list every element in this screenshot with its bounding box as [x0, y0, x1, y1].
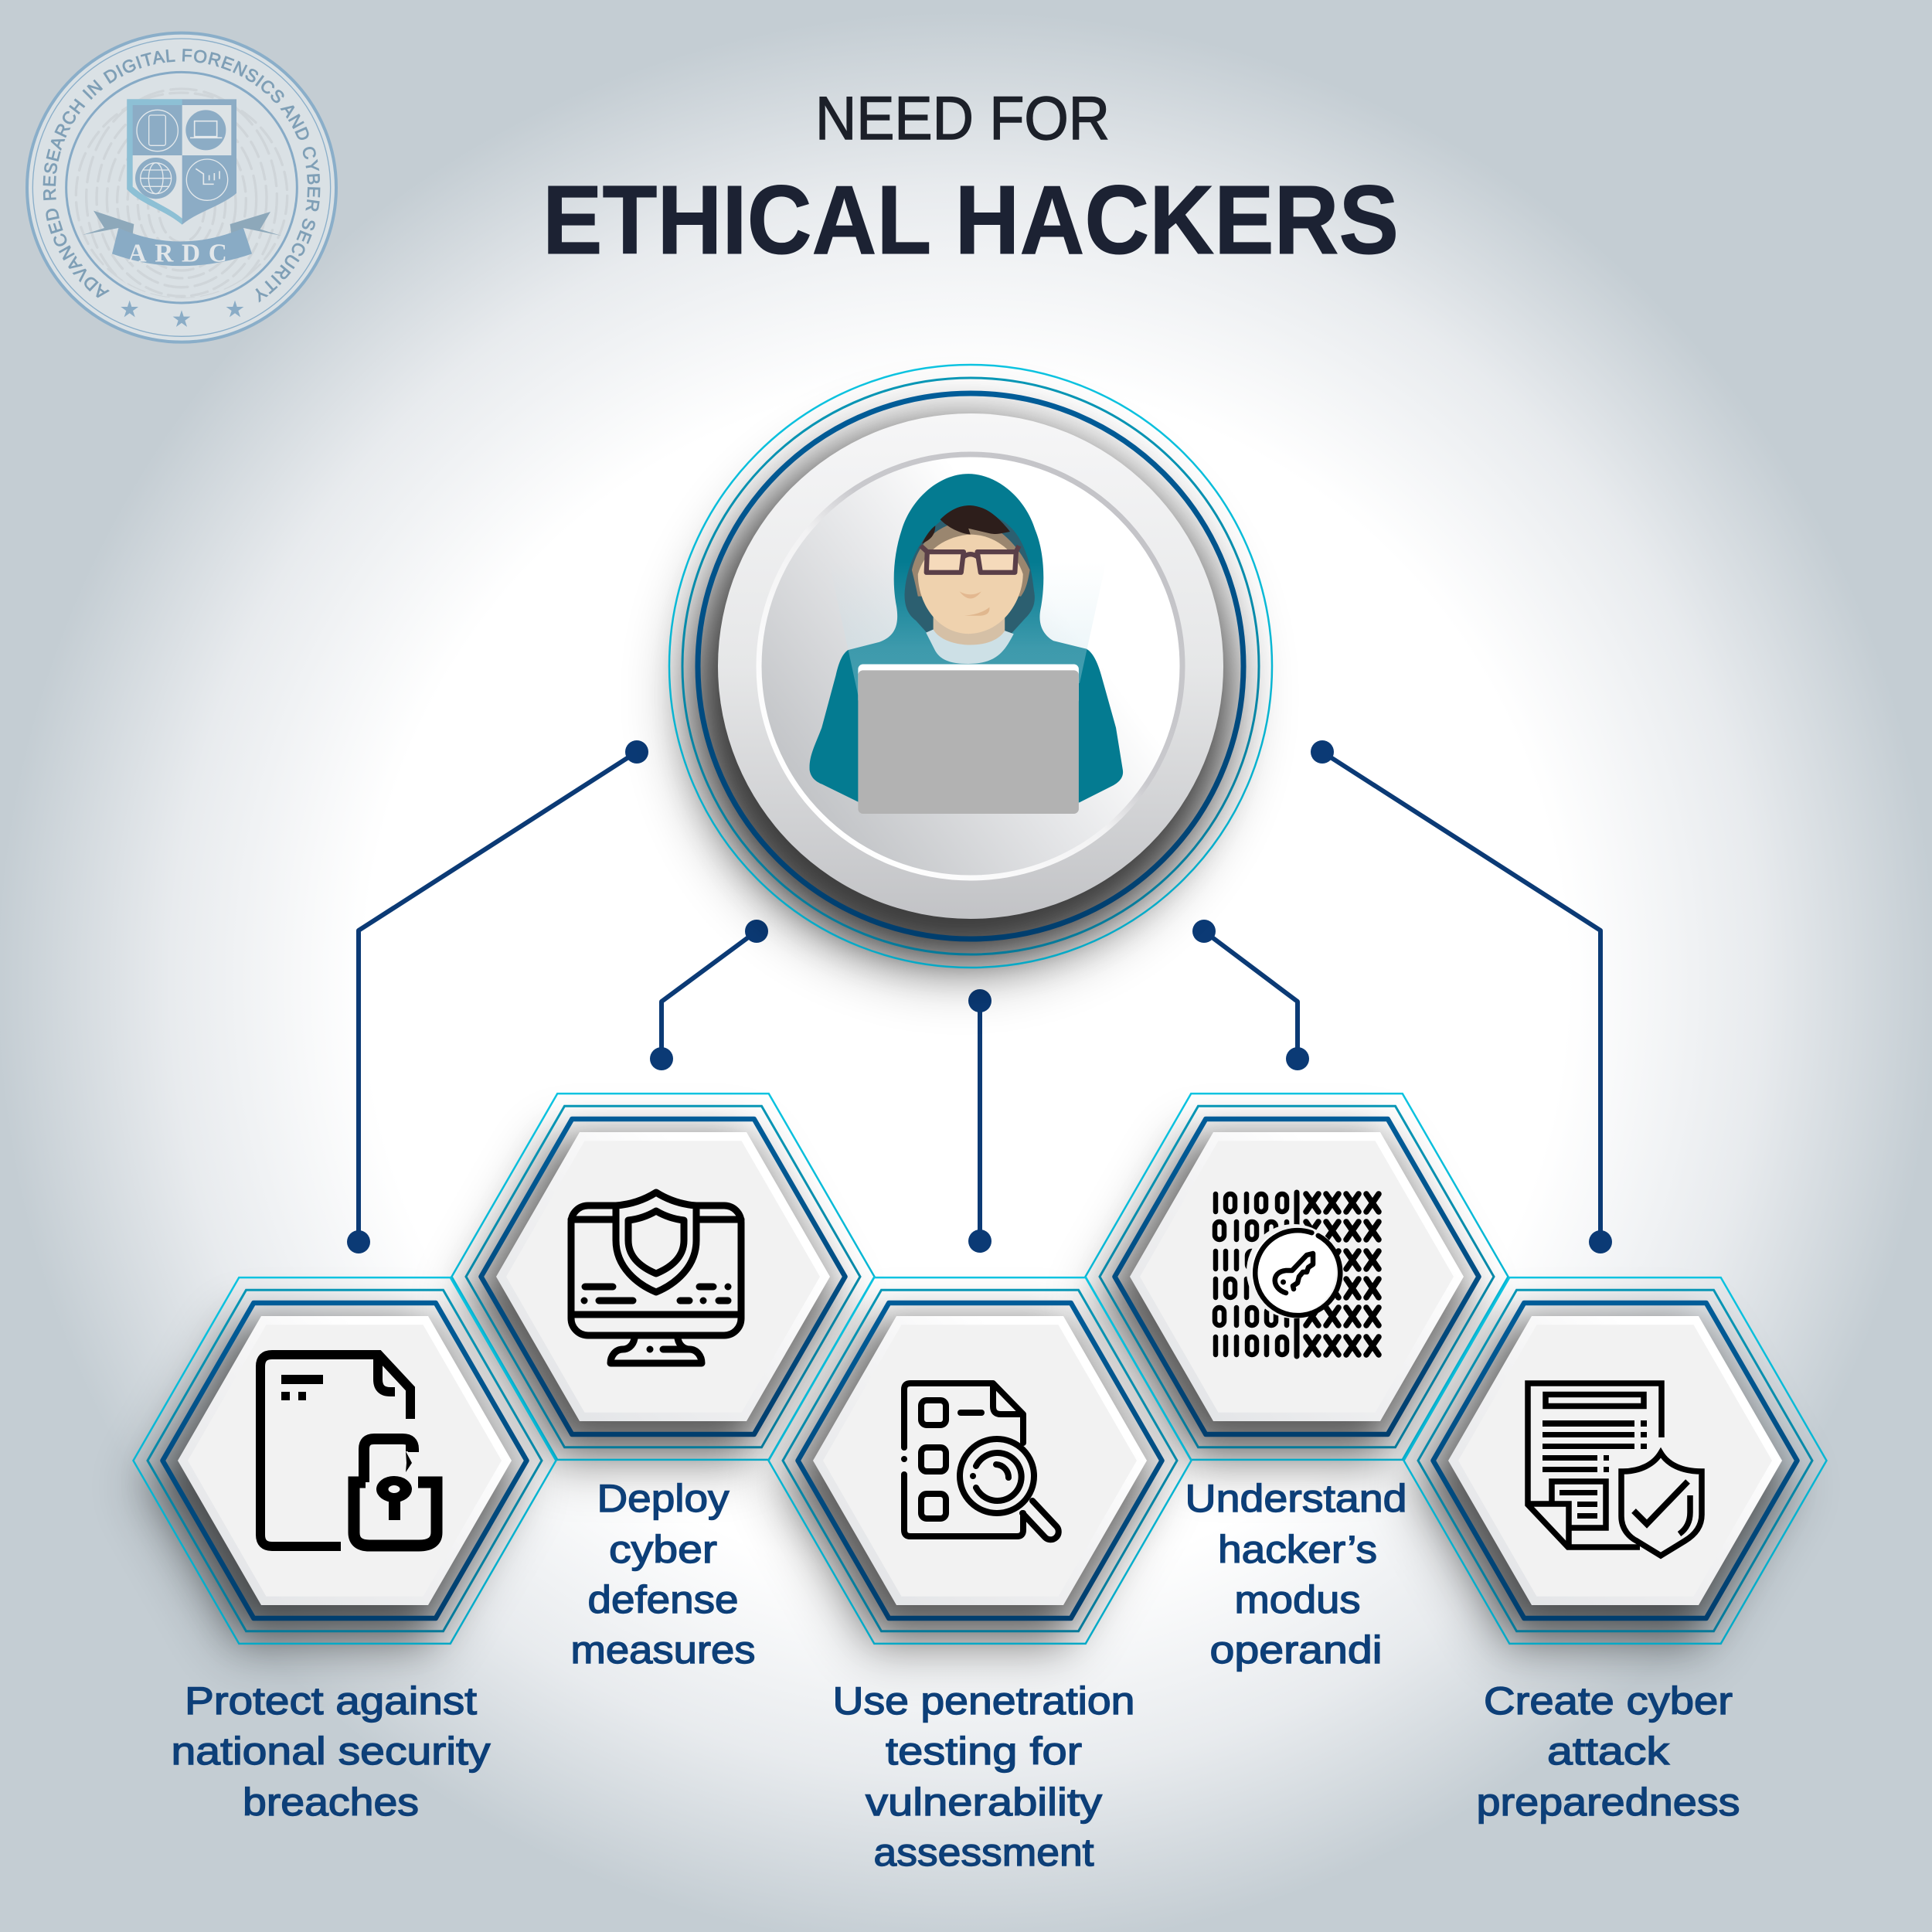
icon: report with shield — [1528, 1383, 1702, 1556]
label: protect against national security breaches: national security — [172, 1730, 490, 1773]
seal stars — [121, 301, 243, 327]
label: create cyber attack preparedness: attack — [1547, 1730, 1670, 1773]
hexagon: deploy cyber defense — [451, 1094, 875, 1460]
label: create cyber attack preparedness — [1476, 1679, 1740, 1824]
connector 3 — [968, 989, 992, 1253]
label: understand hacker's modus operandi — [1185, 1477, 1406, 1672]
label: use penetration testing: Use penetration — [833, 1679, 1134, 1723]
label: understand hacker's modus operandi: hacker’s — [1218, 1528, 1377, 1571]
label: protect against national security breaches — [172, 1679, 490, 1824]
seal ring text — [56, 61, 308, 297]
hexagon: penetration testing — [768, 1277, 1192, 1644]
central circle — [668, 365, 1272, 988]
icon: binary code with key — [1215, 1192, 1379, 1356]
hexagon: protect against breaches — [133, 1277, 556, 1644]
icon: document with broken lock — [260, 1355, 437, 1546]
connector 4 — [1192, 920, 1309, 1070]
label: deploy cyber defense measures: cyber — [609, 1528, 717, 1571]
label: deploy cyber defense measures — [570, 1477, 756, 1672]
hexagon: understand modus operandi — [1085, 1094, 1509, 1460]
logo: ARDC seal: ADVANCED RESEARCH IN DIGITAL FORENSICS AND CYBER SECURITY — [43, 49, 320, 303]
hexagon shadows — [131, 1131, 1801, 1659]
connector 1 — [347, 740, 648, 1253]
icon: document with magnifier — [904, 1383, 1059, 1539]
label: understand hacker's modus operandi: modus — [1235, 1578, 1360, 1621]
icon: monitor with shield — [571, 1192, 741, 1363]
label: protect against national security breaches: Protect against — [185, 1679, 477, 1723]
title line: NEED FOR: NEED FOR — [815, 83, 1110, 152]
hacker illustration — [810, 474, 1123, 814]
shield — [127, 99, 236, 225]
label: use penetration testing: vulnerability — [866, 1781, 1102, 1824]
label: create cyber attack preparedness: Create cyber — [1484, 1679, 1733, 1723]
label: deploy cyber defense measures: measures — [570, 1628, 756, 1672]
connector 2 — [650, 920, 768, 1070]
label: create cyber attack preparedness: preparedness — [1476, 1781, 1740, 1824]
connector 5 — [1311, 740, 1612, 1253]
label: protect against national security breaches: breaches — [243, 1781, 419, 1824]
title line: ETHICAL HACKERS: ETHICAL HACKERS — [543, 165, 1399, 274]
label: use penetration testing: assessment — [873, 1831, 1094, 1874]
label: understand hacker's modus operandi: operandi — [1210, 1628, 1382, 1672]
ribbon: ARDC — [128, 239, 235, 267]
label: understand hacker's modus operandi: Understand — [1185, 1477, 1406, 1520]
label: deploy cyber defense measures: Deploy — [597, 1477, 730, 1520]
hexagon: cyber attack preparedness — [1403, 1277, 1827, 1644]
label: use penetration testing — [833, 1679, 1134, 1874]
ribbon — [83, 211, 281, 267]
label: deploy cyber defense measures: defense — [587, 1578, 739, 1621]
label: use penetration testing: testing for — [886, 1730, 1082, 1773]
fingerprint — [76, 89, 287, 305]
